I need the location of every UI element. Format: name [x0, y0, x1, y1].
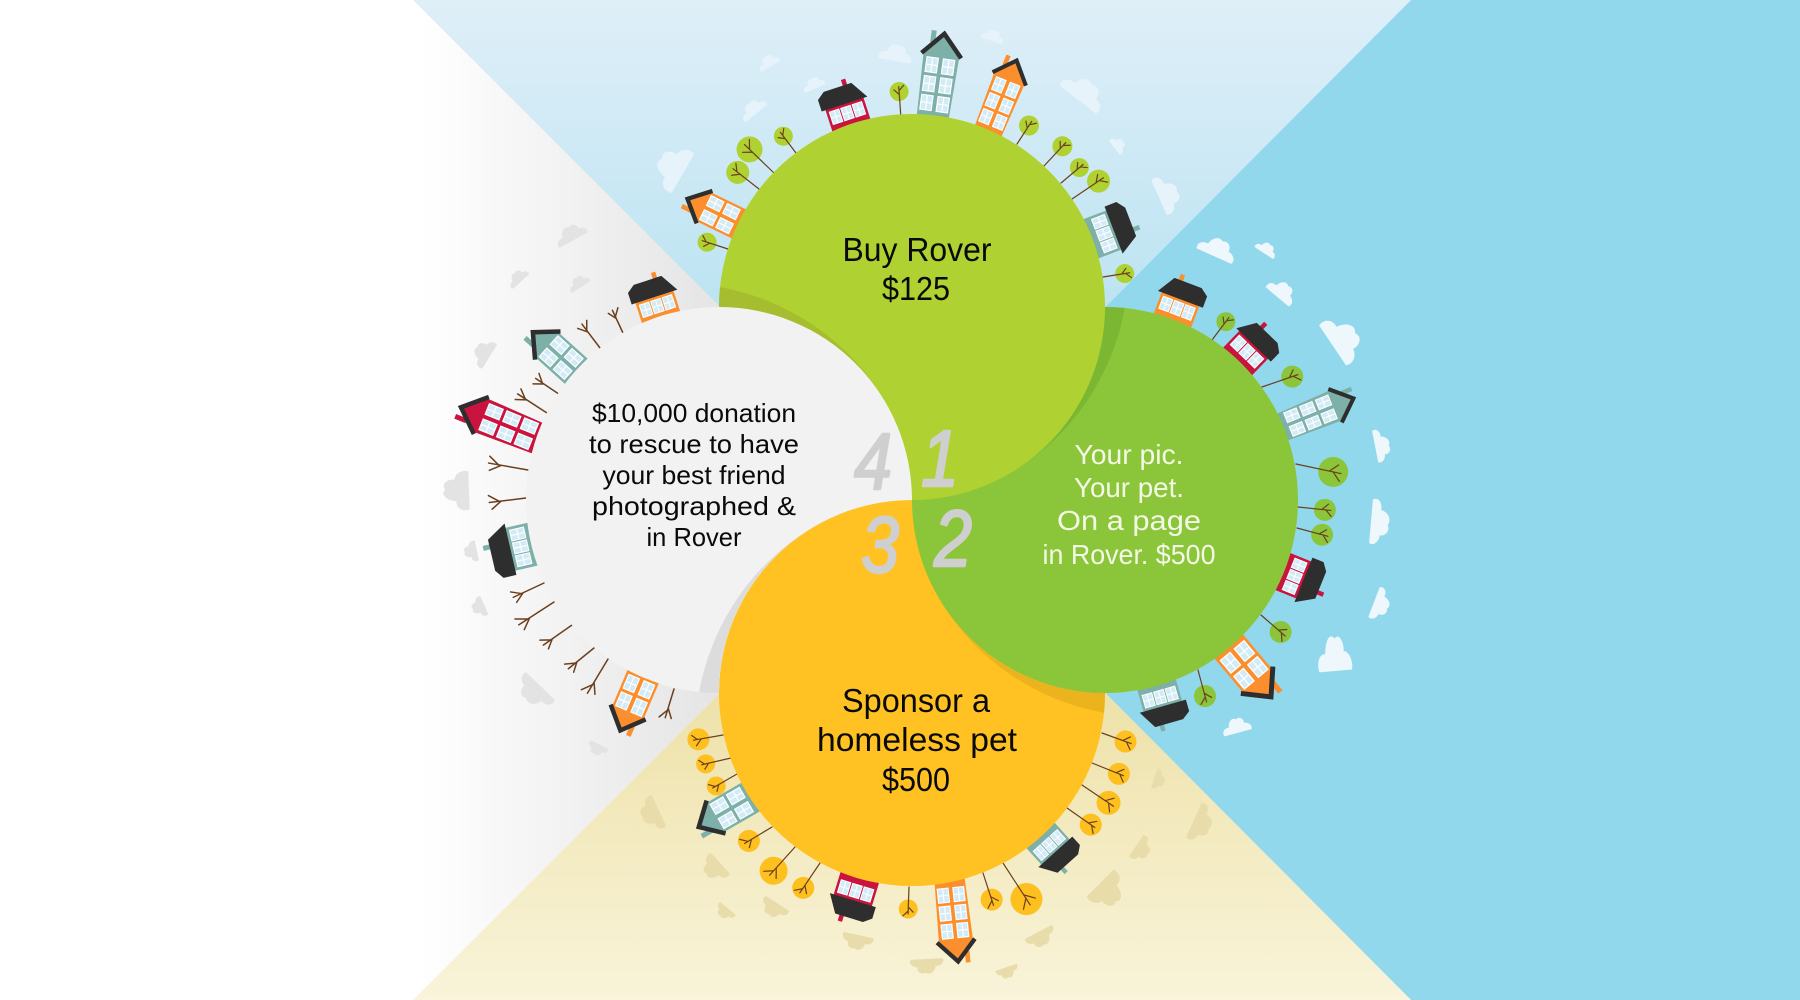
text: donation: $10,000 donation [592, 398, 796, 428]
text: donation [589, 398, 799, 552]
white circle [526, 307, 912, 693]
text: your pic: On a page [1057, 505, 1201, 536]
text: donation: your best friend [602, 460, 786, 490]
icon: teal house right [1080, 198, 1146, 263]
number 3: 3 [861, 500, 899, 589]
icon: orange tall house [971, 52, 1034, 139]
icon: teal house lower [1133, 676, 1192, 736]
text: donation: to rescue to have [589, 429, 799, 459]
icon: red long house [452, 388, 548, 458]
icon: orange house left [678, 182, 748, 241]
green trees right [1187, 308, 1351, 710]
panel: sponsor a homeless pet [635, 500, 1219, 981]
background: bottom sand quadrant [413, 500, 1411, 1000]
yellow trees [686, 723, 1140, 921]
icon: teal house [519, 317, 592, 388]
text: your pic [1042, 439, 1216, 570]
text: your pic: Your pet. [1074, 472, 1184, 503]
icon: teal house left [688, 780, 762, 844]
panel: buy rover [648, 27, 1185, 500]
lime trees top [695, 81, 1136, 286]
icon: orange long house [1211, 631, 1288, 712]
text: your pic: Your pic. [1074, 439, 1184, 470]
text: sponsor a homeless pet: Sponsor a [842, 682, 991, 719]
text: buy rover: $125 [882, 270, 950, 307]
text: sponsor a homeless pet [817, 682, 1017, 798]
clouds: grey [443, 219, 609, 759]
icon: orange house lower [602, 666, 662, 740]
icon: teal house right [1023, 819, 1088, 884]
icon: teal stacked house [479, 517, 543, 581]
panel: your pic your pet [912, 231, 1395, 736]
icon: red house [814, 74, 875, 135]
number 4: 4 [854, 417, 892, 506]
text: buy rover: Buy Rover [842, 231, 992, 268]
text: buy rover [842, 231, 992, 307]
shadow crescent on white circle [699, 536, 798, 693]
text: donation: in Rover [646, 522, 742, 552]
icon: teal tall house [913, 29, 964, 122]
bare trees [487, 308, 680, 720]
text: your pic: in Rover. $500 [1042, 539, 1216, 570]
background: left white-grey quadrant [0, 0, 913, 1000]
icon: orange house [1149, 268, 1211, 331]
number 1: 1 [921, 414, 959, 503]
yellow circle [719, 500, 1105, 886]
shadow crescent on yellow circle [950, 615, 1105, 713]
text: sponsor a homeless pet: $500 [882, 761, 950, 798]
icon: red house [1219, 311, 1288, 380]
clouds: sand [635, 768, 1219, 981]
icon: teal long house [1275, 381, 1362, 444]
text: sponsor a homeless pet: homeless pet [817, 721, 1017, 758]
icon: red house [823, 869, 883, 930]
icon: red house lower [1271, 548, 1335, 611]
text: donation: photographed & [592, 491, 796, 521]
lime circle [719, 114, 1105, 500]
number 2: 2 [933, 494, 972, 583]
shadow crescent on lime circle [719, 287, 874, 384]
background: right blue quadrant [913, 0, 1800, 1000]
clouds: white right [1196, 231, 1395, 736]
background: top sky quadrant [413, 0, 1411, 500]
icon: orange tall house [931, 878, 977, 965]
panel: donation [443, 219, 912, 759]
icon: orange house top [624, 267, 685, 328]
shadow crescent on green circle [1031, 307, 1124, 460]
green circle [912, 307, 1298, 693]
clouds: pale top [648, 27, 1185, 216]
